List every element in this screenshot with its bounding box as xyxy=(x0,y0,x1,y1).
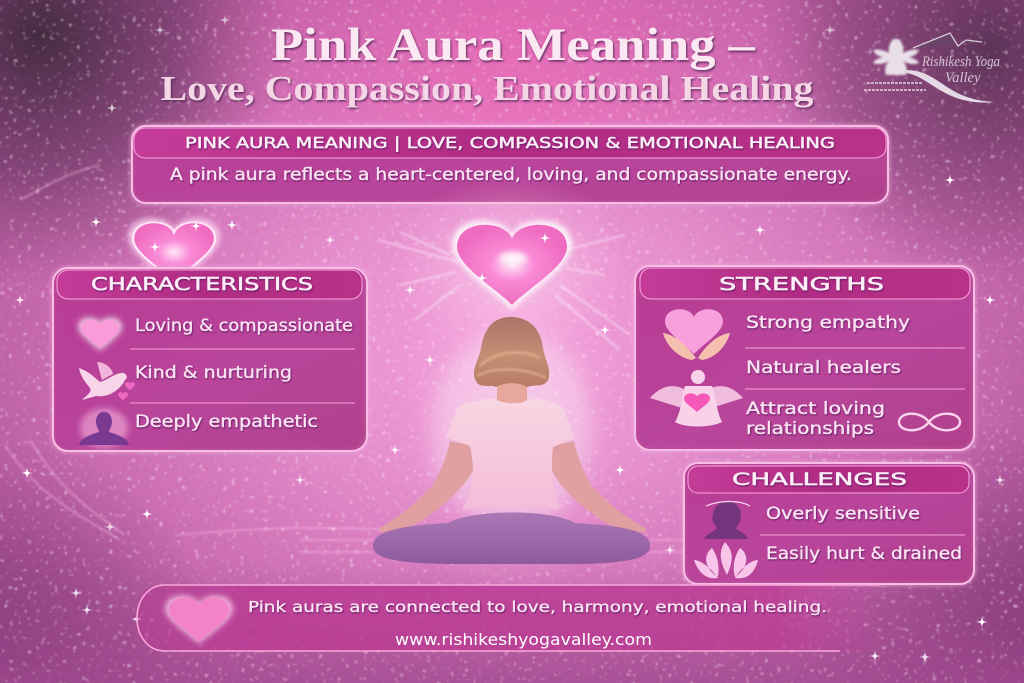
logo: Rishikesh Yoga Valley: Valley xyxy=(945,70,981,86)
neck xyxy=(497,380,527,408)
text: attract loving relationships xyxy=(746,399,885,438)
text: sensitive: Overly sensitive xyxy=(766,504,920,523)
text: easily hurt: Easily hurt & drained xyxy=(766,544,962,563)
logo: Rishikesh Yoga Valley: Rishikesh Yoga xyxy=(921,54,1000,70)
icon: heart xyxy=(165,595,233,644)
meditating woman seen from behind xyxy=(373,317,650,564)
characteristics heading: CHARACTERISTICS xyxy=(91,275,313,295)
icon: heart xyxy=(78,317,122,351)
website url: www.rishikeshyogavalley.com xyxy=(395,630,652,649)
panel edge lines xyxy=(137,585,880,651)
item dividers xyxy=(130,349,355,403)
icon: large glowing heart xyxy=(452,220,572,310)
panel: intro banner xyxy=(132,126,888,203)
panel: strengths xyxy=(635,266,974,450)
title: Pink Aura Meaning – xyxy=(271,19,756,71)
challenges header xyxy=(688,466,969,493)
panel: bottom summary xyxy=(137,585,887,651)
text: attract loving relationships: relationships xyxy=(746,419,874,438)
characteristics header xyxy=(57,270,362,299)
title: Love, Compassion, Emotional Healing xyxy=(160,69,814,108)
body glow xyxy=(432,330,592,530)
icon: person silhouette xyxy=(79,408,129,448)
text: empathy: Strong empathy xyxy=(746,313,910,332)
arms xyxy=(379,441,475,532)
text: attract loving relationships: Attract loving xyxy=(746,399,885,418)
banner header xyxy=(134,128,886,158)
banner body text: A pink aura reflects a heart-centered, loving, and compassionate energy. xyxy=(170,165,852,184)
icon: small glowing heart above characteristics xyxy=(128,218,220,287)
text: kind: Kind & nurturing xyxy=(135,363,292,382)
legs xyxy=(373,512,650,564)
item dividers xyxy=(745,348,965,389)
challenges heading: CHALLENGES xyxy=(732,470,907,490)
central light rays and aura xyxy=(378,175,632,610)
logo: Rishikesh Yoga Valley xyxy=(864,33,1000,103)
strengths header xyxy=(640,268,970,299)
icon: winged angel with heart xyxy=(650,370,743,426)
title xyxy=(160,19,814,108)
text: healers: Natural healers xyxy=(746,358,901,377)
icon: infinity symbol xyxy=(899,414,960,430)
text: empathetic: Deeply empathetic xyxy=(135,412,318,431)
icon: heart held in hands xyxy=(663,309,730,360)
banner heading text: PINK AURA MEANING | LOVE, COMPASSION & EMOTIONAL HEALING xyxy=(185,134,835,152)
text: loving: Loving & compassionate xyxy=(135,316,353,335)
strengths heading: STRENGTHS xyxy=(719,275,884,295)
hair xyxy=(474,317,549,387)
icon: dove xyxy=(79,362,135,400)
shirt xyxy=(446,398,575,510)
icon: silhouette over lotus xyxy=(694,501,758,578)
panel: characteristics xyxy=(53,268,367,451)
panel: challenges xyxy=(684,463,974,584)
item divider xyxy=(760,534,965,536)
summary text: Pink auras are connected to love, harmony, emotional healing. xyxy=(248,598,827,616)
